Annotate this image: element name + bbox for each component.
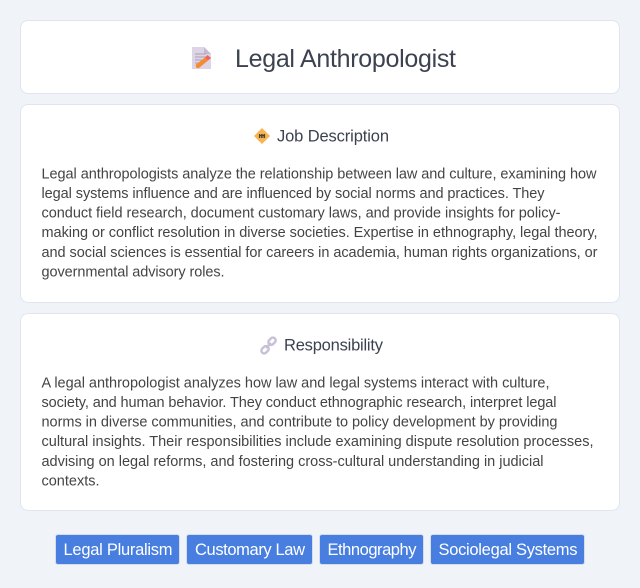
text block: job description: legal systems influence and are influenced by social norms and practices. They: [42, 186, 545, 202]
tag: Ethnography: [319, 534, 424, 565]
icon: document with pencil: [192, 47, 211, 69]
icon: diamond sign: [254, 128, 270, 144]
tag: Customary Law: [186, 534, 313, 565]
tag: Legal Pluralism: [55, 534, 180, 565]
text block: job description: conduct field research, document customary laws, and provide insights for policy-: [42, 206, 561, 222]
heading: job description: Job Description: [277, 128, 389, 146]
text block: responsibility: A legal anthropologist analyzes how law and legal systems interact with culture,: [42, 376, 550, 392]
text block: responsibility: contexts.: [42, 473, 100, 489]
title: Legal Anthropologist: [235, 45, 456, 73]
panel: job description: [20, 104, 620, 303]
icon: chain link: [260, 336, 277, 355]
text block: job description: governmental advisory roles.: [42, 264, 224, 280]
panel: title card: [20, 20, 620, 94]
panel: responsibility: [20, 313, 620, 511]
tag: Ethnography: Ethnography: [328, 541, 417, 559]
text block: job description: [42, 166, 598, 280]
text block: responsibility: advising on legal reforms, and fostering cross-cultural understanding in judicial: [42, 454, 544, 470]
text block: job description: and social sciences is essential for careers in academia, human rights organizations, or: [42, 245, 598, 261]
text block: job description: Legal anthropologists analyze the relationship between law and culture, examining how: [42, 166, 597, 182]
text block: responsibility: norms in diverse communities, and contribute to policy development by providing: [42, 415, 558, 431]
text block: responsibility: society, and human behavior. They conduct ethnographic research, interpret legal: [42, 395, 556, 411]
tag: Sociolegal Systems: [430, 534, 585, 565]
text block: job description: making or conflict resolution in diverse societies. Expertise in ethnography, legal theory,: [42, 225, 598, 241]
text block: responsibility: [42, 376, 594, 489]
tag: Sociolegal Systems: Sociolegal Systems: [438, 541, 578, 559]
tag: Legal Pluralism: Legal Pluralism: [64, 541, 172, 559]
text block: responsibility: cultural insights. Their responsibilities include examining dispute resolution processes,: [42, 434, 594, 450]
tag: Customary Law: Customary Law: [195, 541, 305, 559]
heading: responsibility: Responsibility: [284, 336, 384, 354]
